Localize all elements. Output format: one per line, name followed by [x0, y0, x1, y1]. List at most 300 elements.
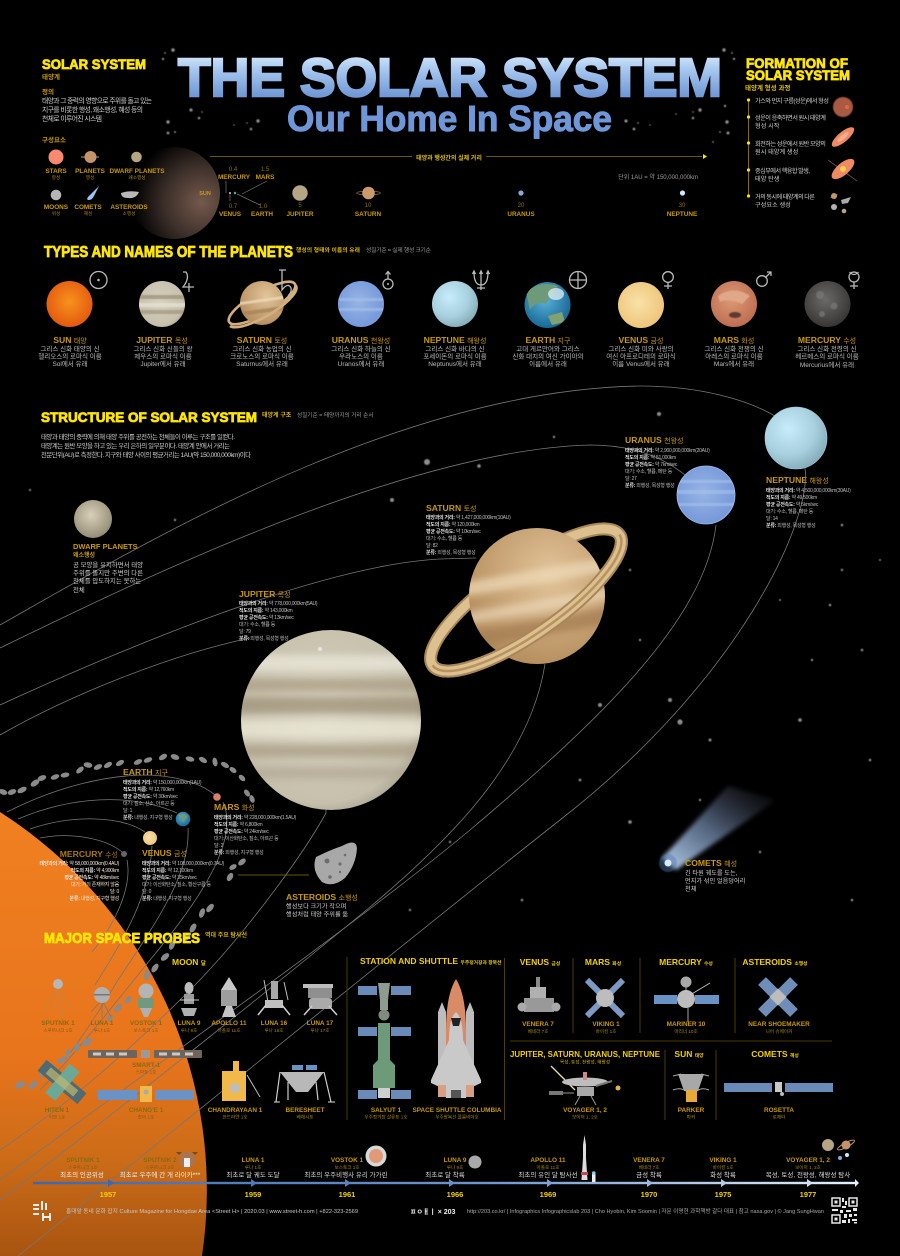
planet card: earth: 이름에서 유래: [529, 359, 567, 368]
probe: smart-1: 스마트 1호: [136, 1068, 156, 1076]
heading: major space probes: MAJOR SPACE PROBES: [44, 931, 200, 947]
panel: solar system definition: 태양계: [42, 72, 60, 81]
event: sputnik 1: 1957: [100, 1190, 116, 1199]
planet: mercury with data: 달: 0: [110, 888, 119, 895]
icon: qr code: [832, 1198, 857, 1224]
planet card: mercury: 헤르메스의 로마식 이름: [795, 352, 859, 360]
panel: mercury probe: MARINER 10: [667, 1021, 706, 1028]
event: viking 1: 바이킹 1호: [713, 1164, 733, 1171]
footer: [33, 1198, 857, 1224]
panel: real distances from the sun: VENUS: [219, 211, 242, 218]
event: luna 9: 1966: [447, 1190, 463, 1199]
sun globe: [128, 147, 220, 239]
probe: luna 1: LUNA 1: [91, 1020, 114, 1027]
probe: chandrayaan 1: 찬드라얀 1호: [223, 1114, 247, 1120]
panel: real distances from the sun: SATURN: [355, 211, 381, 218]
panel: venus probe: [518, 957, 560, 1035]
intro text: 천문단위(AU)로 측정한다. 지구와 태양 사이의 평균거리는 1AU(약 150,000,000km)이다: [41, 450, 251, 459]
panel: formation of solar system: 태양 탄생: [755, 175, 780, 183]
legend: components: DWARF PLANETS: [109, 168, 165, 175]
event: luna 1: 1959: [245, 1190, 261, 1199]
probe: luna 16: LUNA 16: [261, 1020, 288, 1027]
footer: 홍대앞 동네 문화 잡지 Culture Magazine for Hongdae Area <Street H> | 2020.03 | www.street-h.com | +822-323-2569: [66, 1207, 358, 1215]
planet: mars with data: 평균 공전속도: 약 24km/sec: [214, 828, 269, 835]
panel: real distances from the sun: 20: [518, 203, 525, 209]
panel: moon probes: [30, 957, 347, 1120]
planet: earth with data: 태양과의 거리: 약 150,000,000km(1AU): [123, 779, 202, 786]
panel: real distances from the sun: JUPITER: [286, 211, 314, 218]
planet: earth with data: 적도의 지름: 약 12,760km: [123, 786, 174, 793]
planet card: sun: [38, 272, 107, 368]
heading: structure of solar system: [41, 409, 373, 459]
event: venera 7: 베네라 7호: [639, 1164, 659, 1171]
panel: formation of solar system: 가스와 먼지 구름(성운)에서 형성: [755, 97, 829, 105]
planet card: mars: 아레스의 로마식 이름: [705, 352, 763, 360]
icon: astronaut: [366, 1146, 386, 1166]
planet: mercury with data: [40, 849, 127, 902]
event: voyager 1, 2: 목성, 토성, 천왕성, 해왕성 탐사: [766, 1170, 850, 1179]
planet: earth with data: [123, 767, 202, 826]
probe: chandrayaan 1: [208, 1061, 263, 1120]
timeline: [33, 1135, 859, 1199]
planet card: mars: [704, 272, 771, 368]
probe: salyut 1: [358, 983, 411, 1120]
probe: luna 1: 루나 1호: [94, 1027, 110, 1034]
planet: uranus with data: URANUS 천왕성: [625, 435, 683, 445]
event: luna 9: [425, 1157, 467, 1199]
subtitle: Our Home In Space: [287, 98, 612, 139]
planet card: venus: 이름 Venus에서 유래: [612, 359, 670, 368]
planet card: mercury: 그리스 신화 전령의 신: [797, 344, 857, 353]
heading: types and names: 행성의 형태와 이름의 유래: [296, 246, 360, 254]
probe: apollo 11: [211, 977, 247, 1034]
event: voyager 1, 2: [766, 1157, 850, 1199]
probe: luna 17: [303, 984, 337, 1034]
heading: FORMATION OF: [746, 55, 848, 71]
planet card: neptune: Neptunus에서 유래: [428, 359, 482, 368]
panel: station and shuttle: STATION AND SHUTTLE 우주정거장과 왕복선: [360, 956, 501, 966]
panel: real distances from the sun: URANUS: [507, 211, 535, 218]
panel: comet probe: [724, 1049, 833, 1120]
legend: components: 위성: [52, 210, 60, 217]
icon: outer planets: [822, 1139, 855, 1160]
probe: salyut 1: 우주정거장 살류트 1호: [364, 1114, 408, 1120]
probe: space shuttle columbia: SPACE SHUTTLE COLUMBIA: [412, 1107, 502, 1114]
icon: laika the dog: [176, 1152, 198, 1168]
event: apollo 11: 아폴로 11호: [537, 1164, 559, 1171]
planet: earth with data: 대기: 질소, 산소, 아르곤 등: [123, 800, 175, 807]
legend: components: 소행성: [123, 210, 135, 216]
planet: mars with data: 분류: 외행성, 지구형 행성: [214, 849, 263, 856]
planet: dwarf planets: [73, 500, 143, 594]
asteroids callout: ASTEROIDS 소행성: [286, 892, 358, 902]
probe: salyut 1: SALYUT 1: [371, 1107, 402, 1114]
planet: earth with data: 평균 공전속도: 약 30km/sec: [123, 793, 178, 800]
planet: neptune with data: [765, 407, 851, 529]
panel: venus probe: VENUS 금성: [520, 957, 560, 967]
event: vostok 1: 보스토크 1호: [335, 1165, 359, 1170]
probe: luna 16: 루나 16호: [264, 1027, 284, 1034]
legend: components: 항성: [52, 174, 60, 180]
event: sputnik 1: 스푸트니크 1호: [68, 1164, 98, 1171]
planet: mars with data: 대기: 이산화탄소, 질소, 아르곤 등: [214, 835, 279, 842]
timeline axis: [33, 1182, 855, 1184]
planet: uranus with data: 분류: 외행성, 목성형 행성: [625, 482, 674, 489]
event: vostok 1: 1961: [339, 1190, 355, 1199]
event: venera 7: 금성 착륙: [636, 1170, 662, 1179]
probe labels: hiten 1: HITEN 1: [45, 1107, 70, 1114]
event: sputnik 2: 최초로 우주에 간 개 라이카***: [120, 1170, 201, 1179]
panel: real distances from the sun: 태양과 행성간의 실제 거리: [416, 154, 482, 162]
heading: SOLAR SYSTEM: [42, 56, 146, 72]
panel: formation of solar system: 성운이 응축하면서 원시 태양계: [755, 114, 826, 122]
planet: neptune with data: 태양과의 거리: 약 4,500,000,000km(30AU): [766, 487, 851, 494]
planet: neptune with data: NEPTUNE 해왕성: [766, 475, 829, 485]
icon: saturn v rocket and astronaut: [581, 1135, 596, 1182]
planet: mars with data: 달: 2: [214, 842, 224, 849]
planet: earth with data: 분류: 내행성, 지구형 행성: [123, 814, 172, 821]
panel: outer planets probe: VOYAGER 1, 2: [563, 1107, 607, 1114]
planet card: venus: 여신 아프로디테의 로마식: [606, 352, 676, 360]
planet card: jupiter: JUPITER 목성: [136, 335, 188, 345]
panel: outer planets probe: JUPITER, SATURN, URANUS, NEPTUNE: [510, 1049, 660, 1059]
event: vostok 1: 최초의 우주비행사 유리 가가린: [304, 1170, 388, 1179]
panel: real distances from the sun: NEPTUNE: [667, 211, 698, 218]
planet card: jupiter: 제우스의 로마식 이름: [134, 352, 192, 360]
planet: uranus with data: 평균 공전속도: 약 7km/sec: [625, 461, 678, 468]
panel: solar system definition: 구성요소: [42, 135, 66, 144]
orbit lines: [0, 386, 805, 1256]
planet card: uranus: 우라노스의 이름: [339, 352, 383, 360]
planet: venus with data: 분류: 내행성, 지구형 행성: [142, 895, 191, 902]
planet: venus with data: 대기: 이산화탄소, 질소, 황산구름 등: [142, 881, 212, 888]
planet card: jupiter: 그리스 신화 신들의 왕: [133, 344, 193, 353]
icon: moon: [468, 1156, 482, 1168]
planet: saturn with data: 대기: 수소, 헬륨 등: [426, 535, 463, 542]
event: venera 7: [633, 1157, 665, 1199]
planet: uranus with data: 적도의 지름: 약 51,000km: [625, 454, 676, 461]
panel: formation of solar system: 거의 동시에 태양계의 다른: [755, 193, 815, 201]
panel: real distances from the sun: 30: [679, 203, 686, 209]
planet: mercury with data: 태양과의 거리: 약 58,000,000km(0.4AU): [40, 860, 120, 867]
panel: asteroids probe: [742, 957, 810, 1035]
planet: mars with data: 적도의 지름: 약 6,800km: [214, 821, 262, 828]
big sun: [0, 812, 207, 1256]
planet card: earth: 고대 게르만어와 그리스: [516, 344, 580, 353]
event: sputnik 2: [120, 1157, 201, 1179]
planet card: venus: [606, 272, 676, 368]
planet: uranus with data: 대기: 수소, 헬륨, 메탄 등: [625, 468, 673, 475]
planet: saturn with data: SATURN 토성: [426, 503, 476, 513]
probe: space shuttle columbia: [412, 979, 502, 1120]
planet: neptune with data: 분류: 외행성, 목성형 행성: [766, 522, 815, 529]
asteroids callout: 행성처럼 태양 주위를 돎: [286, 910, 348, 918]
panel: real distances from the sun: [199, 154, 707, 218]
panel: real distances from the sun: 0.7: [229, 204, 238, 210]
planet card: mars: 그리스 신화 전쟁의 신: [704, 344, 764, 353]
main title: [178, 48, 722, 139]
planet: mercury with data: 대기: 거의 존재하지 않음: [71, 881, 120, 888]
footer: http://203.co.kr/ | Infographics Infographicslab 203 | Cho Hyobin, Kim Soomin | 자문 이명현 과학책방 갈다 대표 | 참고 nasa.gov | © Jang SungHwan: [467, 1207, 824, 1215]
legend: components: [44, 150, 165, 217]
planet card: mars: Mars에서 유래: [714, 359, 754, 368]
planet: mars with data: [213, 793, 297, 856]
comet callout: 긴 타원 궤도를 도는,: [685, 869, 738, 877]
panel: formation of solar system: 형성 시작: [755, 122, 780, 130]
panel: real distances from the sun: 1.5: [261, 167, 270, 173]
panel: real distances from the sun: 1.0: [259, 204, 268, 210]
planet card: neptune: NEPTUNE 해왕성: [424, 335, 486, 345]
planet: jupiter with data: 대기: 수소, 헬륨 등: [239, 621, 276, 628]
event: viking 1: [709, 1157, 737, 1199]
planet: saturn with data: [424, 505, 628, 678]
event: luna 9: 최초로 달 착륙: [425, 1170, 465, 1179]
probe: luna 9: 루나 9호: [181, 1027, 197, 1034]
event: apollo 11: [518, 1157, 578, 1199]
event: luna 1: [226, 1157, 280, 1199]
main title: THE SOLAR SYSTEM: [178, 48, 722, 108]
heading: structure of solar system: 태양계 구조: [262, 411, 292, 419]
panel: formation of solar system: 태양계 형성 과정: [745, 83, 790, 92]
probe: chandrayaan 1: CHANDRAYAAN 1: [208, 1107, 263, 1114]
planet: jupiter with data: 달: 79: [239, 628, 251, 635]
probe: luna 1: [91, 987, 114, 1034]
panel: mars probe: 바이킹 1호: [596, 1028, 616, 1035]
planet card: sun: SUN 태양: [53, 335, 87, 345]
planet card: sun: 그리스 신화 태양의 신: [40, 344, 100, 353]
planet card: saturn: 그리스 신화 농업의 신: [232, 344, 292, 353]
event: luna 1: 최초로 달 궤도 도달: [226, 1170, 280, 1179]
panel: solar system definition: 정의: [42, 87, 54, 96]
panel: comet probe: ROSETTA: [764, 1107, 794, 1114]
event: apollo 11: 최초의 유인 달 탐사선: [518, 1170, 578, 1179]
planet: dwarf planets: 왜소행성: [73, 551, 95, 559]
planet: mercury with data: 분류: 내행성, 지구형 행성: [70, 895, 119, 902]
planet: jupiter with data: 분류: 외행성, 목성형 행성: [239, 635, 288, 642]
panel: sun probe: PARKER: [678, 1107, 705, 1114]
probe labels: hiten 1: [45, 1107, 70, 1120]
planet card: sun: Sol에서 유래: [52, 359, 88, 368]
planet card: mercury: [795, 272, 859, 369]
planet card: jupiter: [133, 272, 194, 368]
panel: station and shuttle: [358, 956, 832, 1120]
event: venera 7: 1970: [641, 1190, 657, 1199]
intro text: 태양계는 원반 모양을 하고 있는 우리 은하의 일부분이다. 태양계 안에서 거리는: [41, 441, 230, 450]
probe: luna 9: [178, 982, 201, 1034]
event: luna 9: LUNA 9: [444, 1157, 467, 1164]
legend: components: COMETS: [74, 204, 102, 211]
planet: venus with data: [142, 831, 225, 902]
intro text: 태양과 태양의 중력에 의해 태양 주위를 공전하는 천체들이 이루는 구조를 일컫다.: [41, 432, 235, 441]
probe: chang'e 1: CHANG'E 1: [129, 1107, 164, 1114]
panel: real distances from the sun: SUN: [199, 191, 211, 197]
planet card: uranus: URANUS 천왕성: [332, 335, 390, 345]
panel: outer planets probe: 보이저 1, 2호: [572, 1114, 598, 1120]
panel: real distances from the sun: 단위 1AU = 약 150,000,000km: [618, 173, 698, 181]
planet: dwarf planets: 천체: [73, 585, 85, 594]
intro text: [41, 432, 251, 459]
planet: earth with data: 달: 1: [123, 807, 133, 814]
panel: comet probe: COMETS 혜성: [751, 1049, 799, 1059]
event: vostok 1: VOSTOK 1: [331, 1157, 364, 1164]
event: apollo 11: APOLLO 11: [530, 1157, 566, 1164]
panel: outer planets probe: [510, 1049, 660, 1120]
planet: jupiter with data: 평균 공전속도: 약 13km/sec: [239, 614, 294, 621]
planet: saturn with data: 태양과의 거리: 약 1,427,000,000km(10AU): [426, 514, 511, 521]
probe: beresheet: [274, 1065, 335, 1120]
planet: uranus with data: 태양과의 거리: 약 2,900,000,000km(20AU): [625, 447, 710, 454]
background stars: [29, 48, 881, 911]
panel: sun probe: [673, 1049, 709, 1120]
panel: moon probes: MOON 달: [172, 957, 206, 967]
panel: solar system definition: [42, 56, 152, 144]
planet: neptune with data: 평균 공전속도: 약 5km/sec: [766, 501, 819, 508]
event: luna 1: LUNA 1: [242, 1157, 265, 1164]
legend: components: 혜성: [84, 210, 92, 217]
panel: real distances from the sun: MARS: [256, 174, 275, 181]
planet card: neptune: [423, 271, 490, 368]
event: apollo 11: 1969: [540, 1190, 556, 1199]
panel: mercury probe: [654, 957, 719, 1035]
planet card: venus: VENUS 금성: [619, 335, 663, 345]
probe: vostok 1: VOSTOK 1: [130, 1020, 163, 1027]
event: viking 1: 화성 착륙: [710, 1170, 736, 1179]
planet card: earth: 신화 대지의 여신 가이아의: [512, 352, 584, 360]
panel: mercury probe: 마리너 10호: [674, 1028, 698, 1035]
heading: major space probes: 역대 주요 탐사선: [205, 931, 247, 939]
panel: asteroids probe: NEAR SHOEMAKER: [748, 1021, 810, 1028]
probe labels: hiten 1: 히텐 1호: [49, 1114, 65, 1120]
event: voyager 1, 2: VOYAGER 1, 2: [786, 1157, 830, 1164]
planet: saturn with data: 분류: 외행성, 목성형 행성: [426, 549, 475, 556]
planet card: saturn: 크로노스의 로마식 이름: [230, 352, 294, 360]
planet card: saturn: SATURN 토성: [237, 335, 287, 345]
planet: venus with data: 태양과의 거리: 약 108,000,000km(0.7AU): [142, 860, 225, 867]
event: venera 7: VENERA 7: [633, 1157, 665, 1164]
asteroid belt: [0, 753, 255, 1090]
planet card: mars: MARS 화성: [714, 335, 754, 345]
planet: jupiter with data: 태양과의 거리: 약 778,000,000km(5AU): [239, 600, 318, 607]
probe: apollo 11: APOLLO 11: [211, 1020, 247, 1027]
planet card: uranus: Uranos에서 유래: [338, 359, 384, 368]
comet callout: [659, 786, 776, 893]
panel: formation of solar system: [745, 55, 858, 213]
footer: ㅍㅇㅐㅣ × 203: [410, 1207, 456, 1216]
planet: uranus with data: 달: 27: [625, 475, 637, 482]
probe: beresheet: BERESHEET: [285, 1107, 325, 1114]
planet card: mercury: Mercurius에서 유래: [800, 360, 854, 369]
comet callout: COMETS 혜성: [685, 858, 737, 868]
legend: components: ASTEROIDS: [110, 204, 148, 211]
event: sputnik 1: SPUTNIK 1: [66, 1157, 100, 1164]
planet card: earth: [512, 272, 586, 368]
planet: mercury with data: MERCURY 수성: [60, 849, 118, 859]
panel: real distances from the sun: EARTH: [251, 211, 273, 218]
heading: structure of solar system: STRUCTURE OF SOLAR SYSTEM: [41, 409, 257, 425]
planet: uranus with data: [625, 435, 735, 524]
panel: mars probe: [585, 957, 623, 1035]
planet: saturn with data: 평균 공전속도: 약 10km/sec: [426, 528, 481, 535]
probe: smart-1: [88, 1050, 202, 1076]
probe: vostok 1: 보스토크 1호: [134, 1028, 158, 1033]
event: sputnik 1: [60, 1157, 116, 1199]
panel: mercury probe: MERCURY 수성: [659, 957, 713, 967]
planet: mars with data: MARS 화성: [214, 802, 255, 812]
event: vostok 1: [304, 1157, 388, 1199]
probe: hiten 1: [30, 1051, 94, 1113]
probe: chang'e 1: 창어 1호: [138, 1114, 154, 1120]
planet: neptune with data: 달: 14: [766, 515, 778, 522]
panel: solar system definition: 지구를 비롯한 행성, 왜소행성, 혜성 등의: [42, 105, 143, 114]
probe: luna 16: [258, 980, 290, 1034]
legend: components: 행성: [86, 174, 94, 180]
panel: real distances from the sun: MERCURY: [218, 174, 251, 181]
probe: vostok 1: [130, 984, 163, 1033]
planet: venus with data: VENUS 금성: [142, 848, 187, 858]
planet: mercury with data: 적도의 지름: 약 4,900km: [71, 867, 119, 874]
planet card: neptune: 그리스 신화 바다의 신: [425, 344, 485, 353]
probe: sputnik 1: 스푸트니크 1호: [43, 1027, 73, 1034]
planet: jupiter with data: JUPITER 목성: [239, 589, 291, 599]
event: luna 9: 루나 9호: [447, 1164, 463, 1171]
probe: sputnik 1: SPUTNIK 1: [41, 1020, 75, 1027]
planet card: uranus: 그리스 신화 하늘의 신: [331, 344, 391, 353]
planet: dwarf planets: 공 모양을 유지하면서 태양: [73, 560, 143, 569]
event: voyager 1, 2: 1977: [800, 1190, 816, 1199]
planet card: saturn: [224, 270, 300, 368]
planet card: saturn: Saturnus에서 유래: [236, 359, 288, 368]
planet card: earth: EARTH 지구: [526, 335, 571, 345]
event: viking 1: VIKING 1: [709, 1157, 737, 1164]
asteroids callout: 행성보다 크기가 작으며: [286, 902, 346, 910]
planet: earth with data: EARTH 지구: [123, 767, 168, 777]
panel: formation of solar system: 원시 태양계 생성: [755, 148, 798, 156]
panel: sun probe: SUN 태양: [674, 1049, 704, 1059]
panel: mars probe: VIKING 1: [592, 1021, 620, 1028]
event: viking 1: 1975: [715, 1190, 731, 1199]
probe: smart-1: SMART-1: [132, 1062, 160, 1069]
planet: jupiter with data: 적도의 지름: 약 143,000km: [239, 607, 293, 614]
planet: venus with data: 적도의 지름: 약 12,100km: [142, 867, 193, 874]
panel: real distances from the sun: 5: [298, 203, 302, 209]
panel: venus probe: 베네라 7호: [528, 1028, 548, 1035]
probe: sputnik 1: [41, 979, 75, 1034]
planet card: jupiter: Jupiter에서 유래: [140, 359, 186, 368]
planet: saturn with data: 달: 82: [426, 542, 438, 549]
legend: components: MOONS: [44, 204, 69, 211]
legend: components: 왜소행성: [129, 174, 145, 181]
planet: venus with data: 평균 공전속도: 약 35km/sec: [142, 874, 197, 881]
planet card: uranus: [331, 272, 393, 368]
planet card: venus: 그리스 신화 미와 사랑의: [608, 344, 674, 353]
panel: real distances from the sun: 10: [365, 203, 372, 209]
panel: venus probe: VENERA 7: [522, 1021, 554, 1028]
panel: solar system definition: 천체로 이루어진 시스템: [42, 114, 102, 123]
event: sputnik 2: SPUTNIK 2: [143, 1157, 177, 1164]
probe: luna 17: LUNA 17: [307, 1020, 334, 1027]
panel: sun probe: 파커: [687, 1114, 695, 1120]
probe: luna 17: 루나 17호: [310, 1027, 330, 1034]
comet callout: 천체: [685, 885, 697, 893]
planet: saturn with data: 적도의 지름: 약 120,000km: [426, 521, 480, 528]
probe: luna 9: LUNA 9: [178, 1020, 201, 1027]
asteroids callout: [238, 842, 358, 918]
planet: dwarf planets: 주위를 돌지만 주변의 다른: [73, 568, 143, 577]
panel: outer planets probe: 목성, 토성, 천왕성, 해왕성: [560, 1058, 610, 1066]
planet: jupiter with data: [230, 589, 430, 810]
probe: apollo 11: 아폴로 11호: [218, 1027, 240, 1034]
event: luna 1: 루나 1호: [245, 1164, 261, 1171]
